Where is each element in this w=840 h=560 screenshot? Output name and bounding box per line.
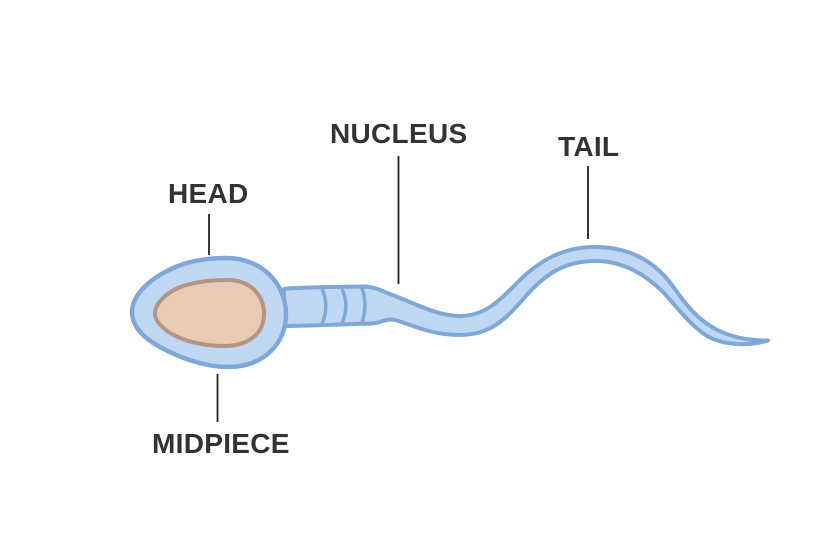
label: head: HEAD [168,178,249,209]
head outline [132,258,286,367]
leader line: head [208,214,210,255]
leader line: tail [587,166,589,239]
sperm body [132,247,768,367]
neck and tail [284,247,768,344]
label: tail: TAIL [558,131,619,162]
leader line: midpiece [216,374,218,422]
label: midpiece: MIDPIECE [152,428,290,459]
midpiece rings [322,288,365,324]
nucleus [155,280,264,346]
leader line: nucleus [398,156,400,284]
label: nucleus: NUCLEUS [330,118,467,149]
